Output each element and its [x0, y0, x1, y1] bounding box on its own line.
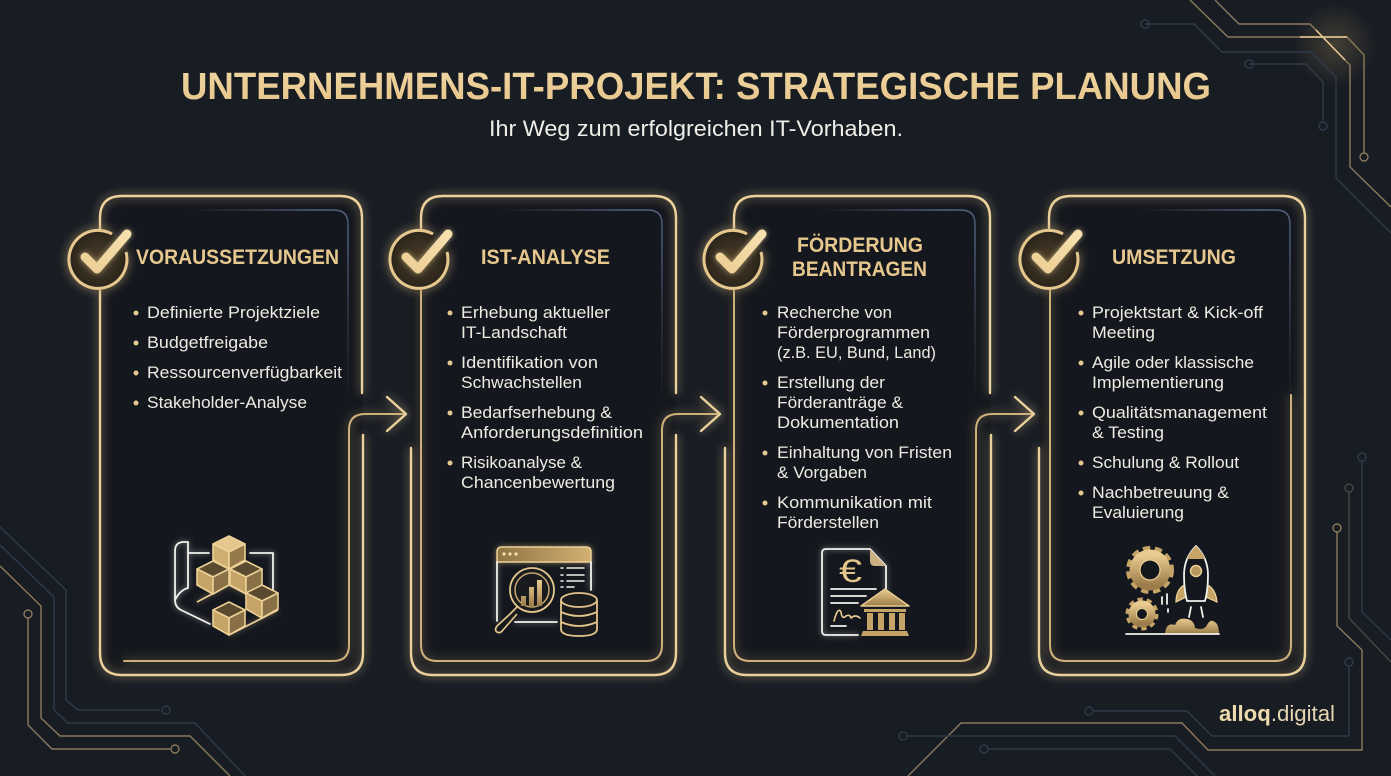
bullet list: (z.B. EU, Bund, Land)	[777, 343, 936, 362]
icon: funding document with bank	[822, 549, 909, 636]
icon: blueprint with cubes	[175, 536, 278, 635]
bullet list: IT-Landschaft	[461, 323, 567, 342]
bullet list: & Testing	[1092, 423, 1164, 442]
icon: checkmark badge	[69, 230, 127, 288]
icon: checkmark badge	[390, 230, 448, 288]
title: UNTERNEHMENS-IT-PROJEKT: STRATEGISCHE PLANUNG	[181, 66, 1211, 108]
bullet list	[448, 303, 643, 492]
bullet list	[762, 303, 952, 532]
heading: UMSETZUNG	[1112, 246, 1236, 269]
bullet list: Evaluierung	[1092, 503, 1184, 522]
panel: Voraussetzungen	[69, 196, 406, 675]
inner blue accent line	[1140, 210, 1290, 395]
bullet list: Ressourcenverfügbarkeit	[147, 363, 342, 382]
circuit top right	[1141, 0, 1391, 233]
glow flare	[1293, 3, 1377, 87]
bullet list: Kommunikation mit	[777, 493, 932, 512]
subtitle: Ihr Weg zum erfolgreichen IT-Vorhaben.	[489, 116, 903, 141]
bullet list: Qualitätsmanagement	[1092, 403, 1267, 422]
bullet list: Definierte Projektziele	[147, 303, 320, 322]
bullet list: Dokumentation	[777, 413, 899, 432]
bullet list: Risikoanalyse &	[461, 453, 583, 472]
heading: FÖRDERUNG	[797, 234, 923, 257]
bullet list: Förderanträge &	[777, 393, 904, 412]
panel frame	[1039, 196, 1305, 675]
icon: checkmark badge	[1020, 230, 1078, 288]
bullet list: Einhaltung von Fristen	[777, 443, 952, 462]
heading: IST-ANALYSE	[481, 246, 610, 269]
icon: funding document with bank: €	[839, 553, 862, 589]
card backgrounds	[100, 196, 1305, 675]
circuit bottom right	[899, 453, 1391, 776]
bullet list: Meeting	[1092, 323, 1155, 342]
bullet list: Agile oder klassische	[1092, 353, 1254, 372]
bullet list	[1078, 303, 1267, 522]
bullet list: Bedarfserhebung &	[461, 403, 613, 422]
bullet list: Identifikation von	[461, 353, 598, 372]
icon: analysis window with database	[496, 547, 597, 636]
bullet list: Erstellung der	[777, 373, 885, 392]
bullet list: Recherche von	[777, 303, 892, 322]
bullet list: Erhebung aktueller	[461, 303, 610, 322]
circuit bottom left	[0, 527, 245, 776]
bullet list: Chancenbewertung	[461, 473, 615, 492]
bullet list: Implementierung	[1092, 373, 1224, 392]
bullet list: Projektstart & Kick-off	[1092, 303, 1263, 322]
bullet list: Förderstellen	[777, 513, 879, 532]
panel frame and arrow	[411, 196, 720, 675]
bullet list: Schwachstellen	[461, 373, 582, 392]
inner blue accent line	[190, 210, 348, 395]
icon: gears and rocket	[1126, 546, 1219, 634]
bullet list: Nachbetreuung &	[1092, 483, 1230, 502]
panel frame and arrow	[100, 196, 406, 675]
panel: Umsetzung	[1020, 196, 1305, 675]
brand logo: alloq.digital	[1219, 701, 1335, 726]
panel frame and arrow	[725, 196, 1034, 675]
bullet list: Anforderungsdefinition	[461, 423, 643, 442]
inner blue accent line	[500, 210, 662, 395]
heading: VORAUSSETZUNGEN	[136, 246, 339, 269]
bullet list: Budgetfreigabe	[147, 333, 268, 352]
bullet list: Stakeholder-Analyse	[147, 393, 307, 412]
inner blue accent line	[820, 210, 975, 395]
icon: checkmark badge	[704, 230, 762, 288]
bullet list: & Vorgaben	[777, 463, 867, 482]
panel: Förderung beantragen	[704, 196, 1034, 675]
panel: Ist-Analyse	[390, 196, 720, 675]
bullet list: Förderprogrammen	[777, 323, 930, 342]
bullet list: Schulung & Rollout	[1092, 453, 1239, 472]
bullet list	[134, 303, 342, 412]
heading line 2: BEANTRAGEN	[792, 258, 927, 281]
